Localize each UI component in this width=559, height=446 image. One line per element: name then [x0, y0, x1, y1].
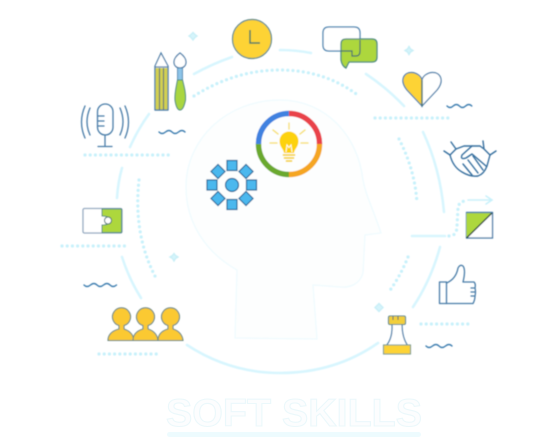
- icon: diagonal square: [466, 212, 492, 238]
- icon: handshake: [444, 141, 496, 176]
- icon: three people: [108, 308, 183, 340]
- icon: chess rook: [384, 316, 410, 354]
- icon: lightbulb ring: [258, 114, 320, 174]
- arrow: to square icon: [468, 196, 492, 204]
- icon: half heart: [403, 72, 441, 106]
- icon: clock: [232, 20, 272, 58]
- icon: thumbs up: [440, 265, 476, 304]
- icon: pencil and brush: [155, 53, 186, 110]
- title underline: [167, 432, 421, 437]
- title: SOFT SKILLS: [166, 392, 422, 435]
- head silhouette: [186, 100, 381, 339]
- icon: puzzle: [83, 208, 122, 233]
- sparkle markers: [170, 32, 413, 312]
- icon: gear: [207, 160, 256, 210]
- icon: microphone: [82, 104, 128, 146]
- icon: speech bubbles: [323, 27, 377, 68]
- wave marks: [84, 104, 472, 348]
- outer ring arcs: [117, 50, 445, 373]
- inner dotted arcs: [62, 70, 469, 354]
